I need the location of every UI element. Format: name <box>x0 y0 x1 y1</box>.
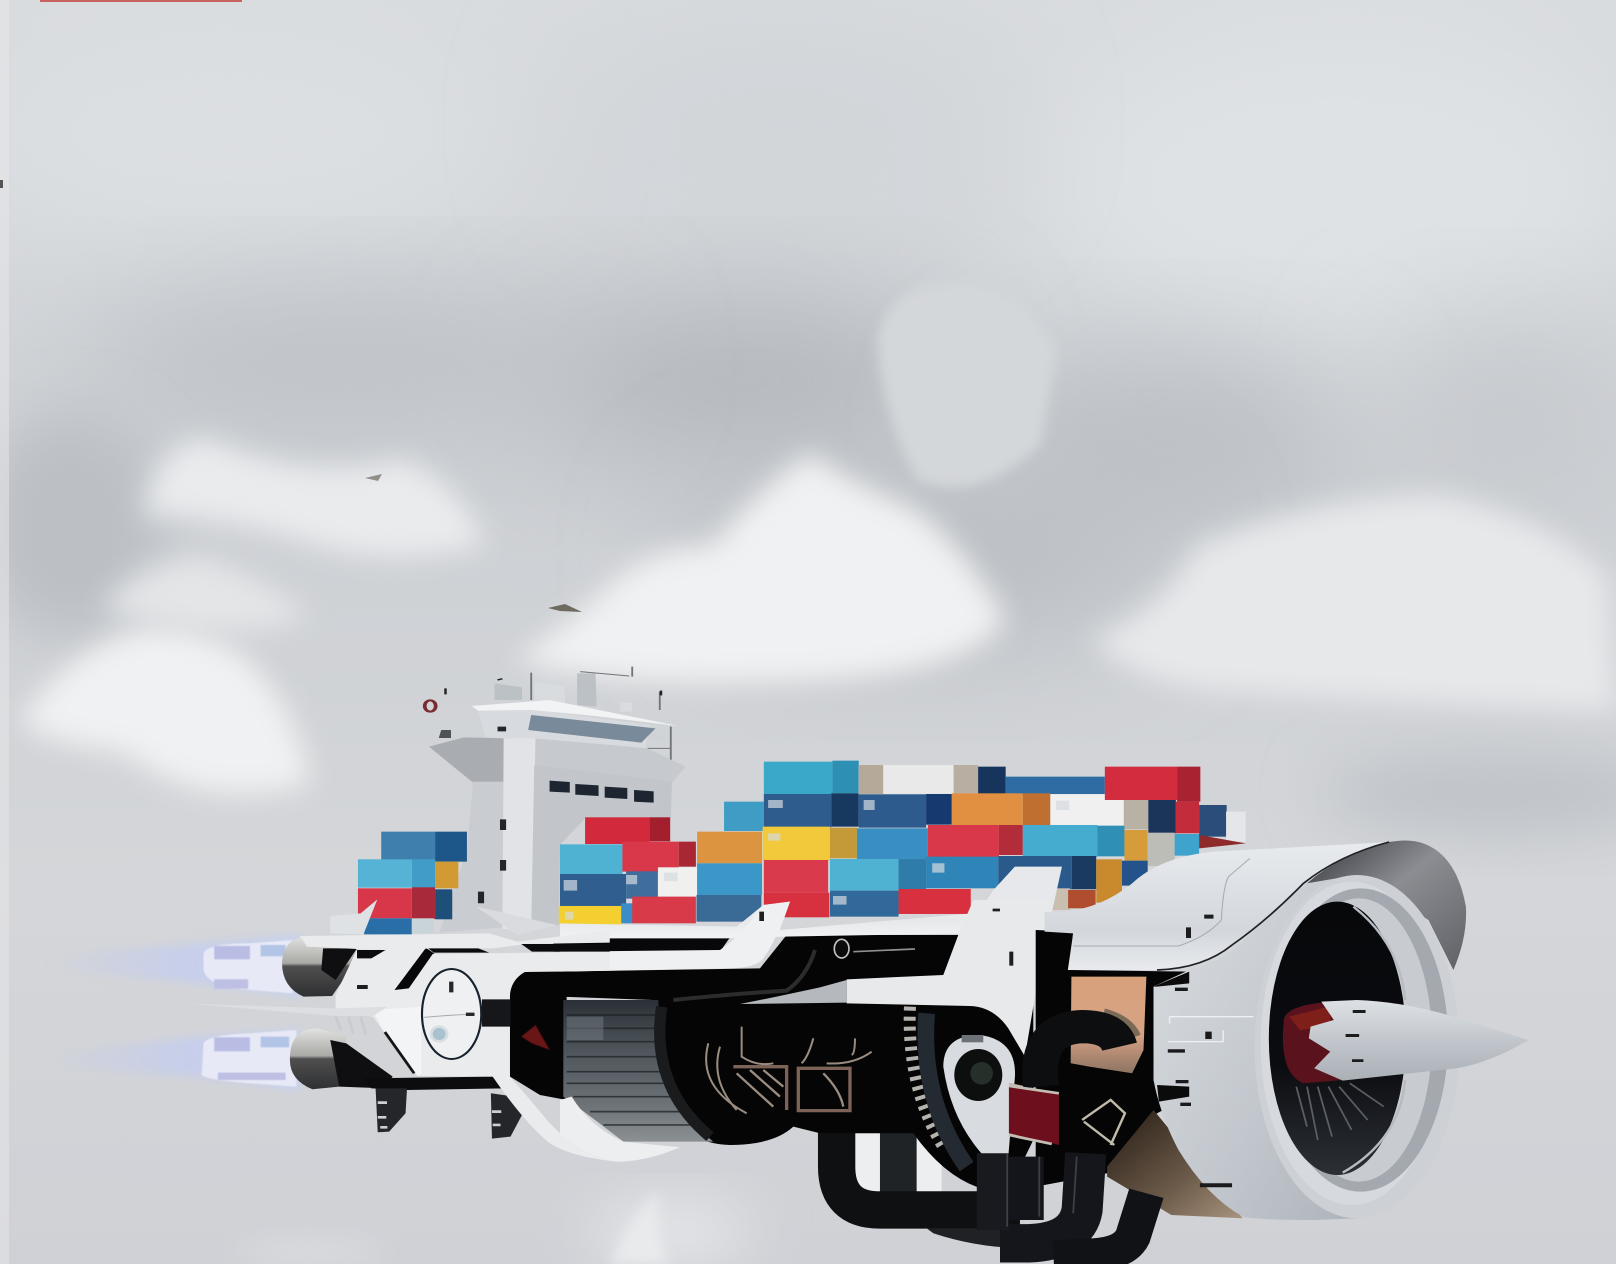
turbocharger housing <box>943 1035 1015 1177</box>
background: right cloud <box>1092 495 1616 711</box>
copper pipe section <box>1071 977 1146 1073</box>
nacelle body <box>1154 875 1357 1220</box>
background: pale dome in cloud <box>878 283 1056 487</box>
containers: forward stacks <box>559 761 1246 950</box>
lower hull band with fin <box>560 902 790 972</box>
bridge tower <box>425 667 685 933</box>
landing linkage <box>336 1017 366 1035</box>
upper plume <box>50 935 300 997</box>
central machinery <box>510 900 1060 1248</box>
underside strut <box>364 1077 511 1097</box>
red pipe clamp <box>1009 1087 1059 1145</box>
black deck slot <box>553 937 730 952</box>
gray turbine drum <box>563 1000 713 1142</box>
thruster nozzles <box>282 936 393 1089</box>
background: left low cloud <box>21 627 309 794</box>
aft hull with thrusters <box>191 899 610 1161</box>
aft black hub <box>510 972 567 1100</box>
stern deck ramp <box>477 907 557 935</box>
distant birds <box>365 474 582 612</box>
brake disk <box>910 1007 967 1167</box>
left edge speck <box>0 180 3 188</box>
main white body <box>336 948 610 1161</box>
bridge windows <box>550 781 654 803</box>
lower plume <box>50 1030 300 1090</box>
spinner cone <box>1309 1000 1528 1081</box>
cargo ship superstructure and containers <box>358 667 1246 950</box>
background: upper-left cloud <box>144 438 484 557</box>
tower portholes <box>478 727 506 903</box>
fan blades <box>1296 1083 1384 1140</box>
cowl upper shroud <box>1045 842 1389 970</box>
rear lip of cowl <box>1307 841 1466 970</box>
engine nacelle <box>993 841 1528 1257</box>
black slit behind body <box>393 948 434 991</box>
containers: aft stack <box>358 832 467 934</box>
white curved fairing <box>560 1097 680 1162</box>
forward mast fin <box>954 867 1062 950</box>
engine back black <box>1036 930 1189 1187</box>
life ring <box>425 700 436 712</box>
exhaust plumes <box>50 935 300 1090</box>
coupling between hatch and core <box>482 999 511 1027</box>
engine intake pipes <box>993 1013 1146 1257</box>
inlet lip rings <box>1255 875 1459 1218</box>
light gap between pipes <box>855 1133 942 1193</box>
sea spray wisp <box>610 1190 668 1264</box>
red band <box>1010 1084 1060 1141</box>
red rotor <box>1283 1003 1343 1083</box>
upper hull band <box>560 902 973 938</box>
round hatch <box>422 969 481 1059</box>
background: left mid cloud <box>103 557 309 632</box>
mid white body <box>847 900 1050 1057</box>
nacelle notches <box>1168 988 1232 1187</box>
stabilizing fins <box>376 1088 522 1139</box>
brown lower casing <box>1107 1110 1243 1218</box>
container markings <box>564 800 1069 920</box>
top edge red line <box>40 0 242 2</box>
background: central cloud <box>515 453 1005 683</box>
inlet dark hole <box>1269 902 1406 1175</box>
rim of drum <box>660 1007 710 1137</box>
thin wing blade <box>191 1004 387 1016</box>
inlet inner highlight <box>1343 907 1405 1173</box>
top hull rail <box>300 930 610 949</box>
lower exhaust pipes <box>837 1130 1060 1248</box>
sensor <box>834 939 849 958</box>
tail flag fin <box>330 899 377 934</box>
red core glow <box>521 1025 550 1050</box>
wiring and heat exchangers <box>706 1027 872 1113</box>
dark engine core <box>560 935 1033 1195</box>
